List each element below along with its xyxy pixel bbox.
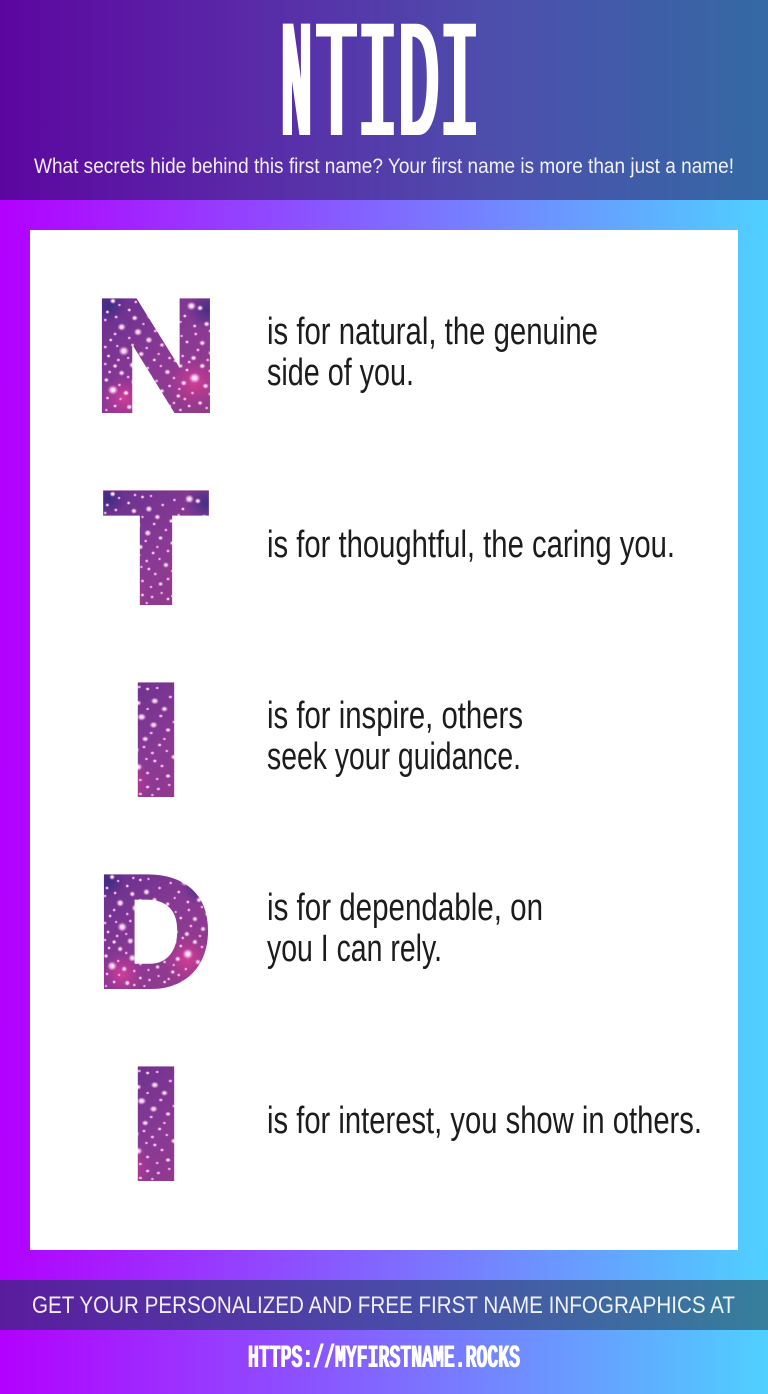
header band [0, 0, 768, 200]
text: D line [267, 887, 543, 970]
text: D line: is for dependable, on [267, 887, 543, 929]
title: TIDI [316, 0, 480, 186]
text: N line: side of you. [267, 352, 414, 394]
title: N [281, 0, 312, 186]
letter T: T [106, 461, 206, 634]
footer band [0, 1280, 768, 1330]
text: N line [267, 311, 598, 394]
footer url: HTTPS://MYFIRSTNAME.ROCKS [248, 1340, 520, 1377]
text: I line [267, 695, 523, 778]
text: I line: seek your guidance. [267, 736, 521, 778]
text: I line: is for inspire, others [267, 695, 523, 737]
text: N line: is for natural, the genuine [267, 311, 598, 353]
text: D line: you I can rely. [267, 928, 442, 970]
letter N: N [95, 269, 217, 442]
letter I: I [130, 654, 182, 826]
letter I (second): I [130, 1038, 182, 1210]
letter D: D [97, 846, 211, 1019]
white panel [30, 230, 738, 1250]
